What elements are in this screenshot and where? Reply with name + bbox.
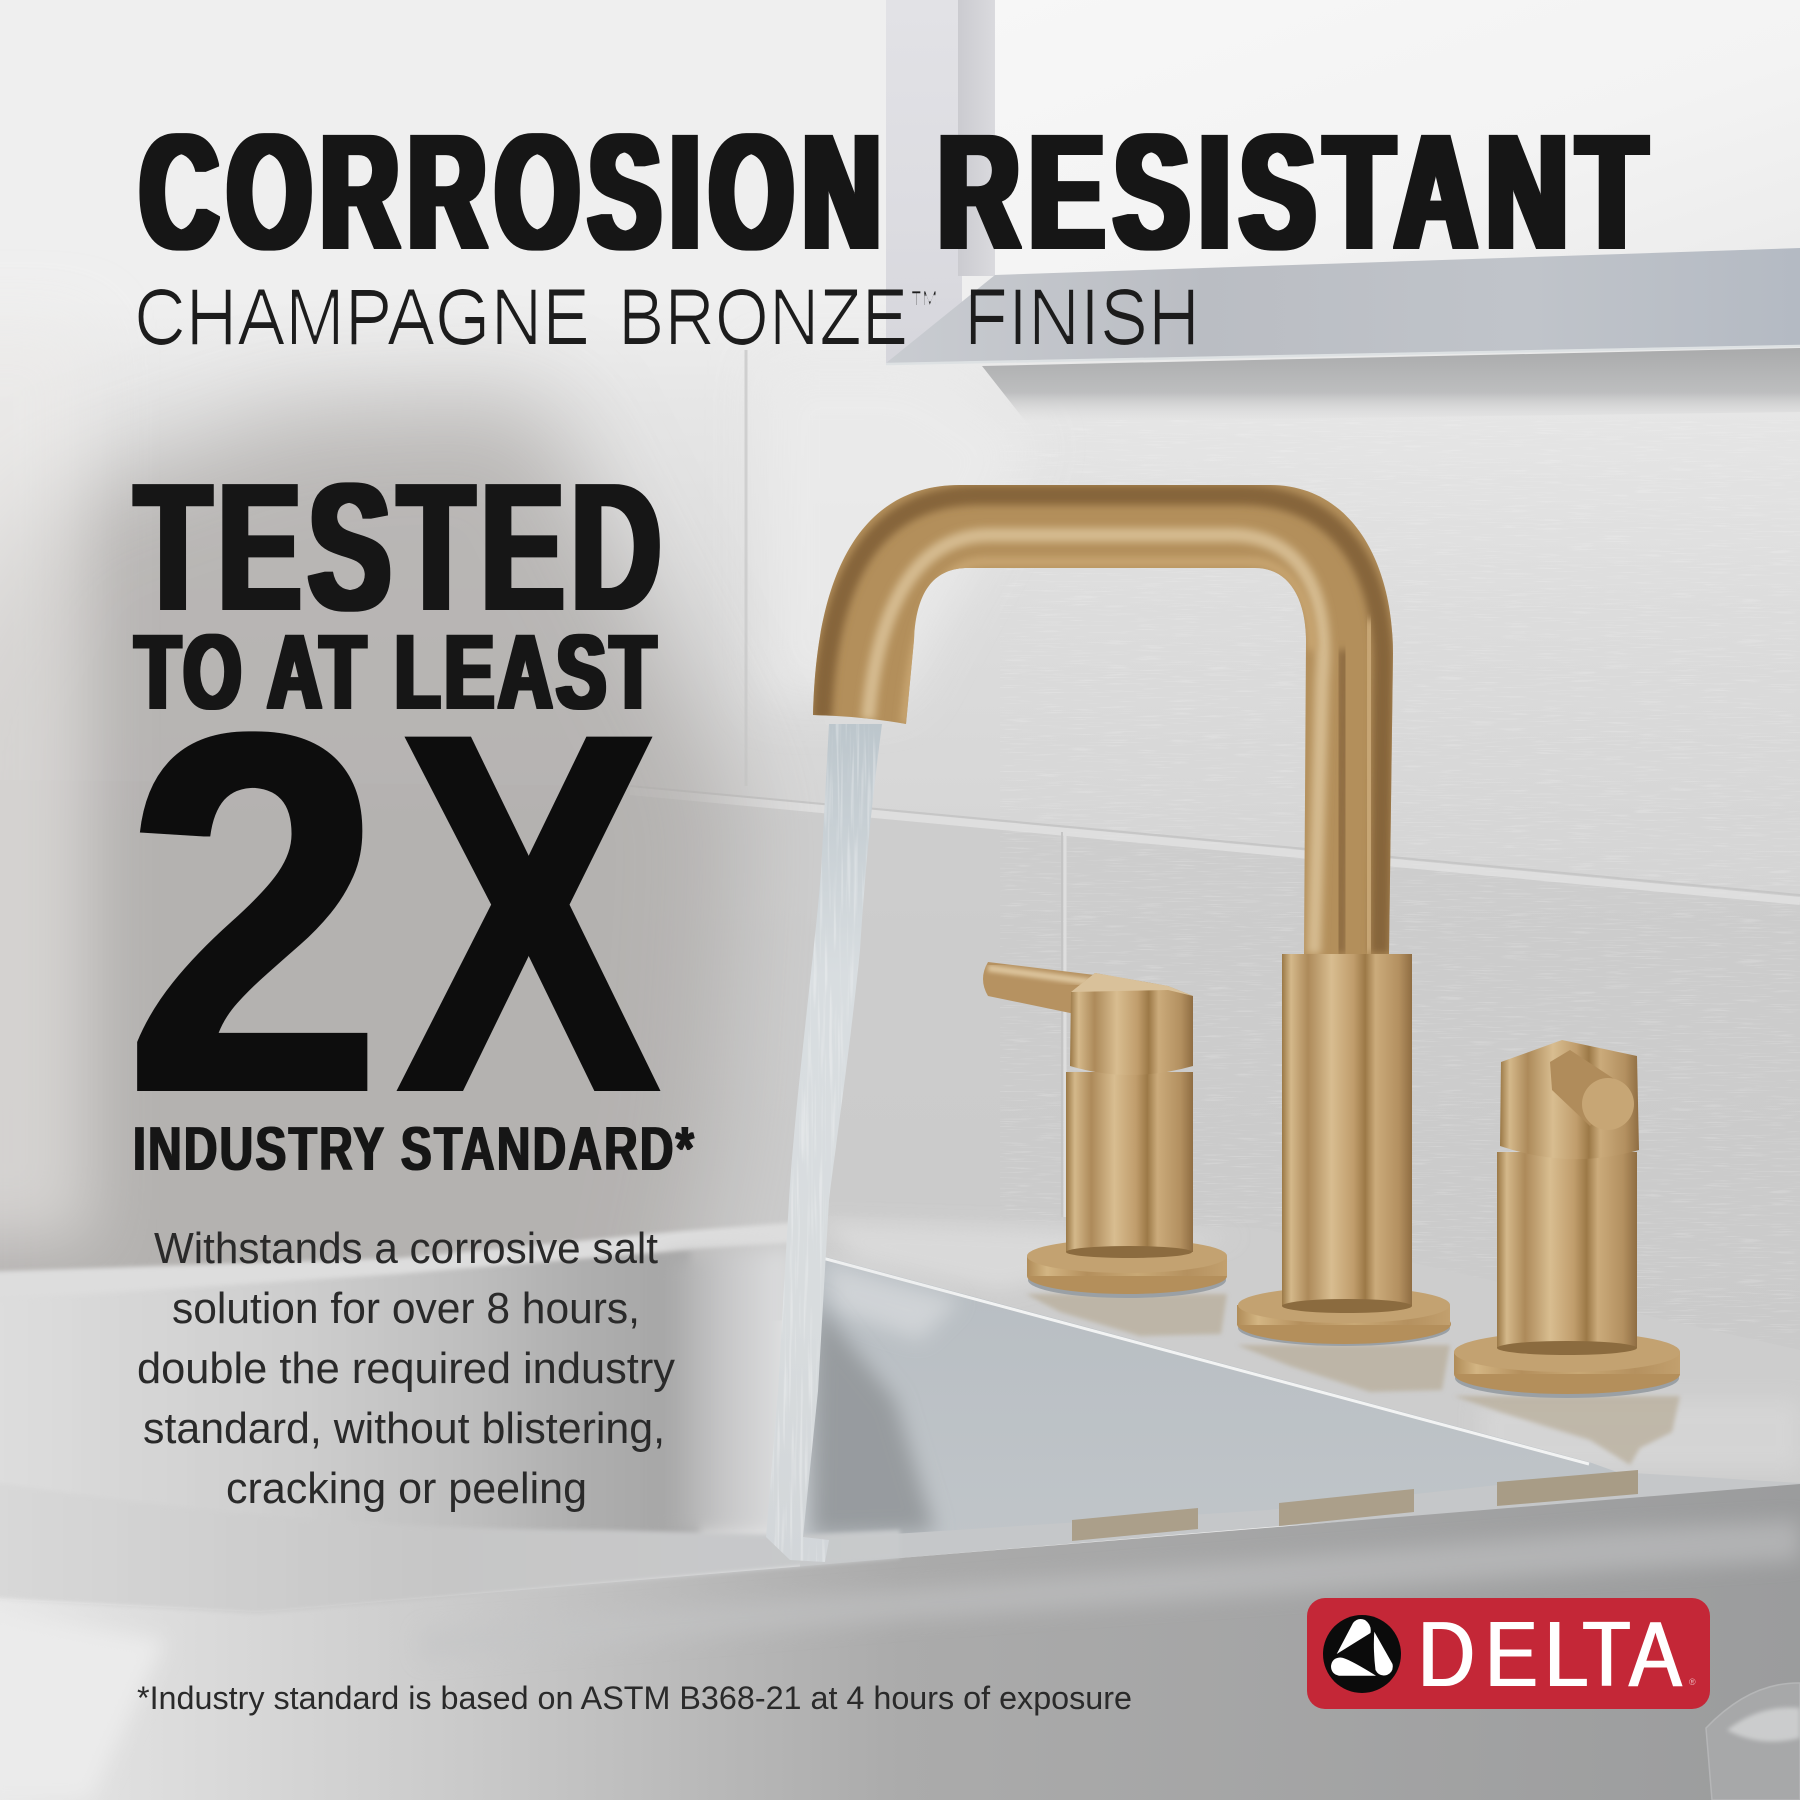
water stream [766, 724, 882, 1562]
registered mark: ® [1689, 1677, 1696, 1687]
shelf shadow [982, 348, 1800, 422]
left handle top [1071, 973, 1193, 996]
left edge lightening [0, 320, 90, 1240]
right handle barrel [1497, 1152, 1637, 1348]
left handle body [1070, 973, 1193, 1075]
subtitle: BRONZE [618, 272, 947, 361]
logo plate [1307, 1598, 1710, 1709]
headline: industry standard: INDUSTRY STANDARD* [133, 1115, 696, 1184]
deck reflections [1026, 1294, 1680, 1541]
body text: double the required industry [137, 1344, 675, 1393]
upper wall light patch [760, 360, 1040, 700]
deck [800, 1215, 1800, 1485]
footnote: *Industry standard is based on ASTM B368-21 at 4 hours of exposure [137, 1680, 1132, 1716]
headline: 2X: 2 [124, 626, 383, 1201]
sink basin right [800, 1250, 1617, 1545]
body text: cracking or peeling [226, 1464, 587, 1513]
headline: 2X: X [396, 626, 663, 1201]
right handle disc [1454, 1332, 1680, 1398]
left haze [0, 400, 740, 1500]
sink front face [0, 1484, 1800, 1800]
faucet spout [800, 470, 1451, 1346]
title: CORROSION [140, 100, 890, 283]
headline: tested: TESTED [135, 447, 668, 648]
body text: Withstands a corrosive salt [154, 1224, 658, 1273]
spout column [1282, 954, 1412, 1306]
sink front rim [800, 1472, 1800, 1570]
subtitle: ™ [908, 283, 940, 324]
body text [137, 1224, 675, 1513]
wall lower tile [0, 780, 1800, 1360]
right handle lever [1550, 1050, 1634, 1130]
right handle body [1500, 1040, 1639, 1159]
left handle disc [1027, 1239, 1227, 1298]
wall sparkle texture [1000, 420, 1800, 1360]
spout base disc [1237, 1270, 1451, 1346]
left handle [983, 962, 1227, 1298]
mirror frame [886, 0, 995, 363]
logo wordmark: DELTA [1418, 1603, 1682, 1706]
deck light patch [820, 1222, 1240, 1290]
subtitle [134, 272, 1200, 361]
sink front highlight band [420, 1520, 1800, 1660]
left handle barrel [1066, 1072, 1193, 1252]
logo mark [1323, 1615, 1401, 1693]
headline: 2X [124, 626, 663, 1201]
glass jar [1706, 1683, 1800, 1800]
bright corner of sink [0, 1610, 165, 1800]
left front rim [0, 1480, 900, 1614]
subtitle: CHAMPAGNE [134, 272, 590, 361]
spout tube [813, 485, 1393, 954]
Delta logo [1307, 1598, 1710, 1709]
shelf [886, 248, 1800, 364]
left sink interior [0, 1250, 700, 1560]
right handle [1454, 1040, 1680, 1398]
mirror [995, 0, 1800, 275]
tile joint lines [630, 350, 1800, 1217]
left handle lever [983, 962, 1095, 1014]
subtitle: FINISH [964, 272, 1200, 361]
body text: standard, without blistering, [143, 1404, 665, 1453]
tiled wall upper [0, 300, 1800, 1360]
left basin inner wall [668, 1248, 792, 1537]
body text: solution for over 8 hours, [172, 1284, 640, 1333]
left sink top rim [0, 1222, 800, 1302]
headline: to at least: TO AT LEAST [135, 614, 660, 731]
